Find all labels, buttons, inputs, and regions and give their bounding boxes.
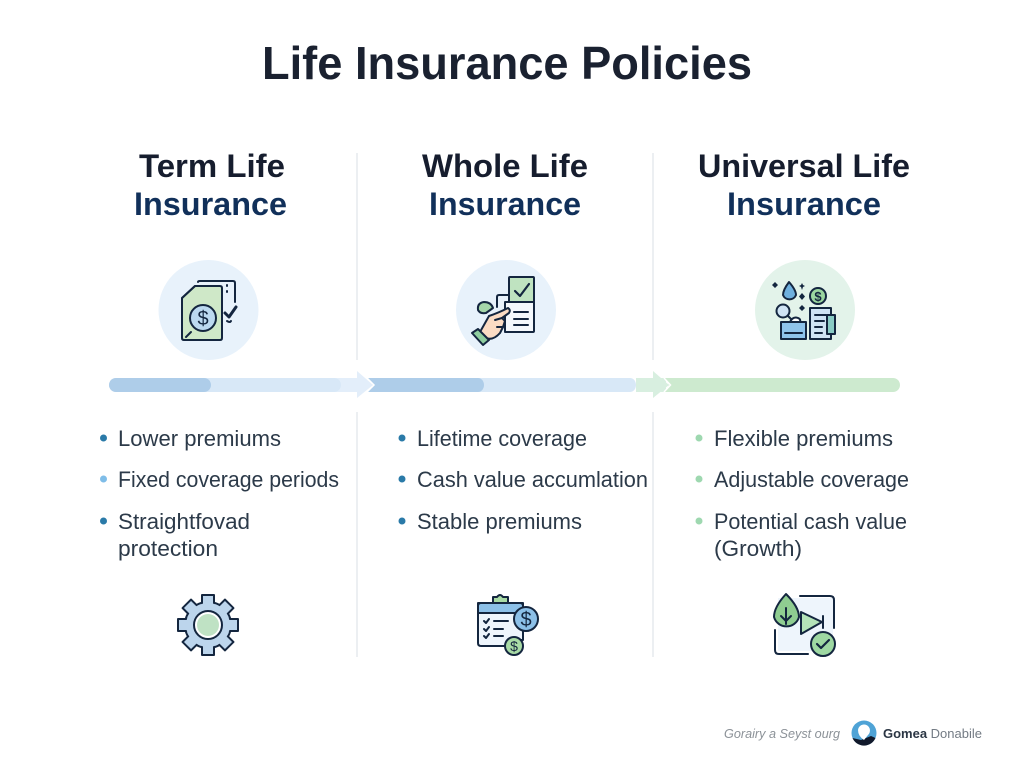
- bullet list: universal life: Potential cash value: [714, 509, 907, 534]
- bullet list: whole life: Cash value accumlation: [417, 467, 648, 492]
- icon: clipboard with coins: $: [520, 609, 532, 631]
- bullet list: whole life: Stable premiums: [417, 509, 582, 534]
- icon: financial tools: $: [814, 289, 822, 304]
- footer attribution: [724, 720, 982, 746]
- footer attribution: Gomea Donabile: [883, 726, 982, 741]
- footer attribution: Gorairy a Seyst ourg: [724, 726, 841, 741]
- heading: universal life: Universal Life: [698, 148, 910, 184]
- heading: whole life: Insurance: [429, 186, 581, 222]
- progress arrow bar: [109, 371, 900, 398]
- icon: gear: [178, 595, 238, 655]
- bullet list: term life: [100, 426, 339, 561]
- bullet list: whole life: Lifetime coverage: [417, 426, 587, 451]
- title: Life Insurance Policies: [262, 37, 752, 89]
- bullet list: term life: Straightfovad: [118, 509, 250, 534]
- heading: whole life: [422, 148, 588, 222]
- bullet list: universal life: [696, 426, 909, 561]
- bullet list: universal life: Adjustable coverage: [714, 467, 909, 492]
- heading: term life: [134, 148, 287, 222]
- bullet list: term life: Fixed coverage periods: [118, 467, 339, 492]
- bullet list: term life: protection: [118, 536, 218, 561]
- icon: clipboard with coins: [478, 595, 538, 655]
- heading: universal life: Insurance: [727, 186, 881, 222]
- bullet list: whole life: [398, 426, 648, 534]
- icon: hand pointing at checklist: [456, 260, 556, 360]
- icon: clipboard with coins: $: [510, 638, 518, 654]
- bullet list: universal life: Flexible premiums: [714, 426, 893, 451]
- icon: policy document with dollar: [158, 260, 258, 360]
- bullet list: term life: Lower premiums: [118, 426, 281, 451]
- heading: term life: Term Life: [139, 148, 285, 184]
- panel: whole life: [398, 148, 648, 655]
- logo: [852, 720, 876, 746]
- icon: policy document with dollar: $: [197, 308, 209, 330]
- icon: financial tools: [755, 260, 855, 360]
- icon: leaf, play and check: [774, 594, 835, 656]
- heading: universal life: [698, 148, 910, 222]
- heading: term life: Insurance: [134, 186, 287, 222]
- heading: whole life: Whole Life: [422, 148, 588, 184]
- panel: universal life: [696, 148, 910, 656]
- bullet list: universal life: (Growth): [714, 536, 802, 561]
- panel: term life: [100, 148, 339, 655]
